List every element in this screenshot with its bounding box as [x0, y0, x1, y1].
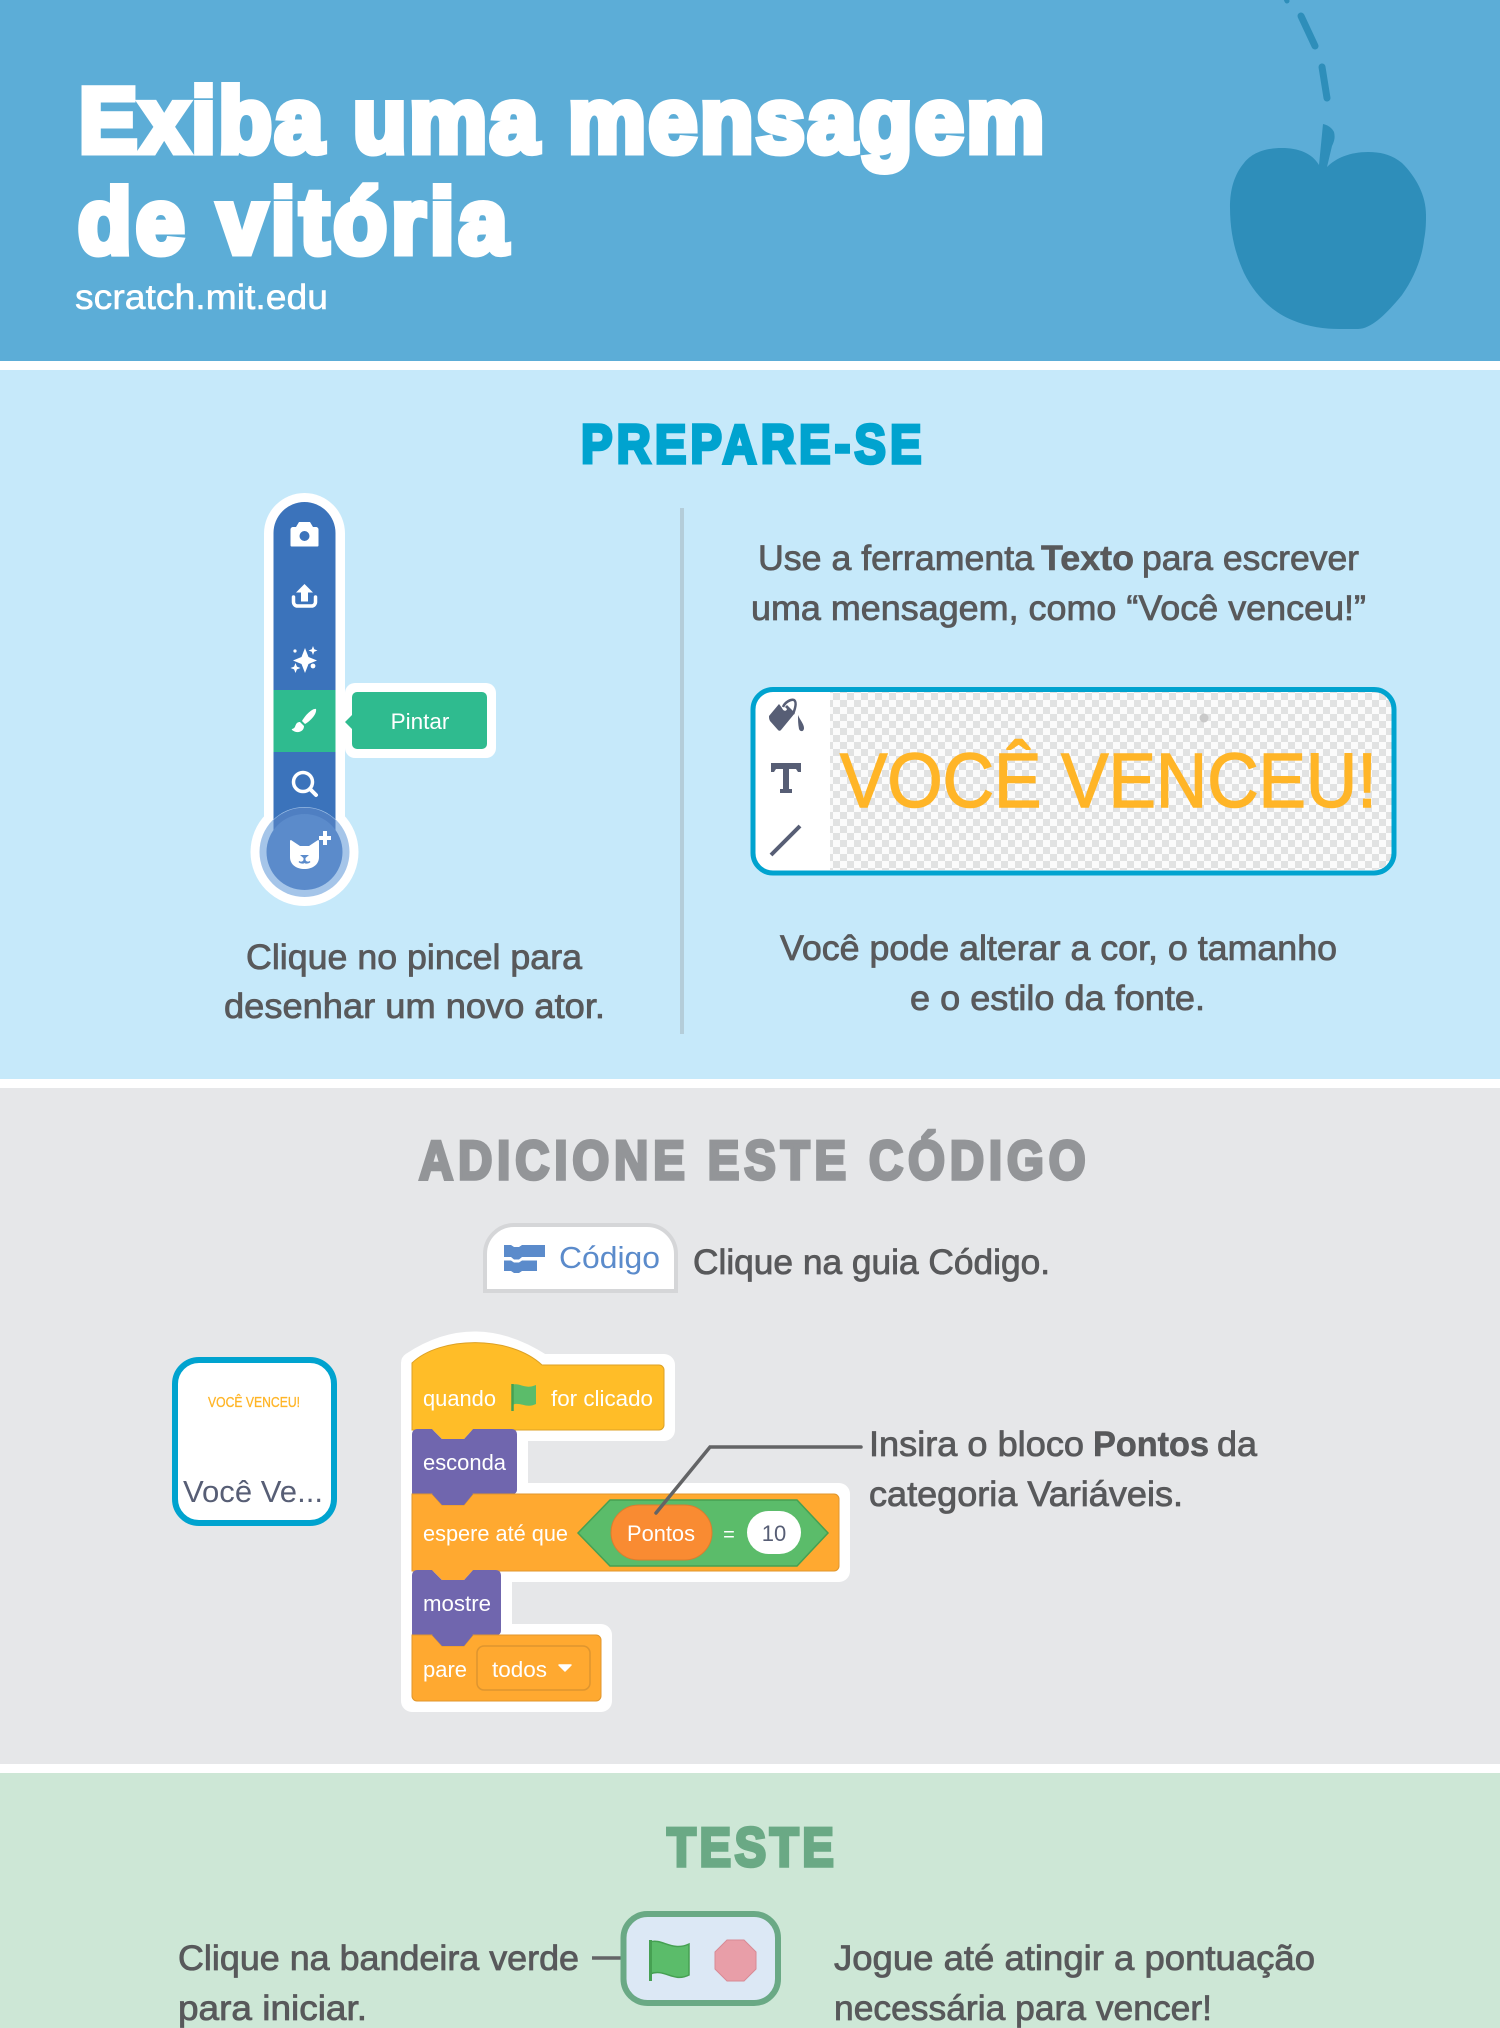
icon: magnifier — [294, 772, 316, 795]
text: click brush: desenhar um novo ator. — [224, 987, 605, 1026]
variable: pontos: Pontos — [627, 1521, 695, 1546]
paint editor image — [751, 687, 1396, 875]
text: use text tool: Texto — [1041, 539, 1134, 578]
panel: teste — [0, 1773, 1500, 2028]
block: hide — [412, 1429, 517, 1505]
block: show — [412, 1570, 501, 1646]
block: wait until — [412, 1494, 839, 1571]
text: insert pontos: da — [1217, 1425, 1258, 1464]
operator hexagon — [578, 1500, 828, 1566]
variable: pontos — [611, 1505, 712, 1560]
block: show: mostre — [423, 1591, 491, 1616]
text: change colour: Você pode alterar a cor, o tamanho — [780, 929, 1337, 968]
text: use text tool — [751, 539, 1366, 628]
connector line — [592, 1956, 637, 1960]
input: 10 — [747, 1511, 801, 1554]
tooltip: pintar — [345, 683, 496, 758]
text: click green flag: Clique na bandeira verde — [178, 1939, 579, 1978]
text: insert pontos: Insira o bloco — [869, 1425, 1084, 1464]
white outline — [412, 1342, 839, 1701]
website url: scratch.mit.edu — [75, 278, 328, 317]
icon: green flag — [650, 1940, 689, 1981]
icon: paint brush — [292, 709, 316, 732]
block: wait until: espere até que — [423, 1521, 568, 1546]
sprite menu — [250, 493, 358, 906]
icon: stop sign — [715, 1940, 756, 1981]
heading: prepare-se: PREPARE-SE — [581, 414, 922, 475]
icon: code blocks — [504, 1245, 545, 1273]
code stack — [412, 1342, 839, 1701]
code tab — [485, 1225, 676, 1291]
text: click code tab: Clique na guia Código. — [693, 1243, 1050, 1282]
title — [78, 70, 1044, 274]
text: você venceu: VOCÊ VENCEU! — [840, 738, 1377, 824]
icon: green flag — [512, 1384, 536, 1411]
text: use text tool: para escrever — [1142, 539, 1359, 578]
icon: text tool — [771, 763, 801, 793]
text: play until win: necessária para vencer! — [834, 1989, 1212, 2028]
tab label: Código — [559, 1240, 660, 1275]
text: insert pontos: Pontos — [1093, 1425, 1209, 1464]
heading: adicione este código: ADICIONE ESTE CÓDIGO — [419, 1130, 1086, 1191]
heading: teste: TESTE — [667, 1817, 834, 1878]
block: stop all: todos — [492, 1657, 547, 1682]
icon: line tool — [771, 826, 800, 855]
text: click brush — [224, 938, 605, 1026]
block: when flag clicked — [412, 1343, 664, 1430]
sprite thumbnail — [175, 1360, 334, 1523]
panel: prepare-se — [0, 370, 1500, 1079]
tooltip: pintar: Pintar — [391, 709, 450, 734]
text: change colour: e o estilo da fonte. — [910, 979, 1205, 1018]
title: de vitória — [78, 171, 508, 274]
text: play until win — [834, 1939, 1315, 2028]
icon: camera — [290, 522, 318, 546]
panel: header — [0, 0, 1500, 361]
block: hide: esconda — [423, 1450, 507, 1475]
block: when flag clicked: quando — [423, 1386, 496, 1411]
text: insert pontos — [869, 1425, 1258, 1514]
icon: sparkles — [290, 646, 318, 673]
text: click green flag — [178, 1939, 579, 2028]
block: wait until: = — [723, 1524, 735, 1546]
callout arrow — [656, 1447, 861, 1513]
sprite thumbnail: Você Ve... — [183, 1474, 323, 1509]
text: insert pontos: categoria Variáveis. — [869, 1475, 1183, 1514]
title: Exiba uma mensagem — [79, 70, 1044, 173]
icon: paint bucket — [769, 700, 804, 731]
input: 10: 10 — [762, 1521, 786, 1546]
block: stop all: pare — [423, 1657, 467, 1682]
sprite thumbnail: VOCÊ VENCEU! — [208, 1394, 300, 1411]
flag and stop buttons — [624, 1914, 778, 2003]
text: click green flag: para iniciar. — [178, 1989, 367, 2028]
text: click brush: Clique no pincel para — [246, 938, 583, 977]
icon: upload — [294, 584, 316, 606]
block: stop all — [412, 1635, 601, 1701]
text: use text tool: Use a ferramenta — [758, 539, 1035, 578]
text: change colour — [780, 929, 1337, 1018]
icon: falling apple — [1230, 0, 1426, 329]
panel: adicione este código — [0, 1088, 1500, 1764]
text: use text tool: uma mensagem, como “Você venceu!” — [751, 589, 1366, 628]
text: play until win: Jogue até atingir a pontuação — [834, 1939, 1315, 1978]
choose sprite button — [260, 807, 350, 897]
block: when flag clicked: for clicado — [551, 1386, 653, 1411]
